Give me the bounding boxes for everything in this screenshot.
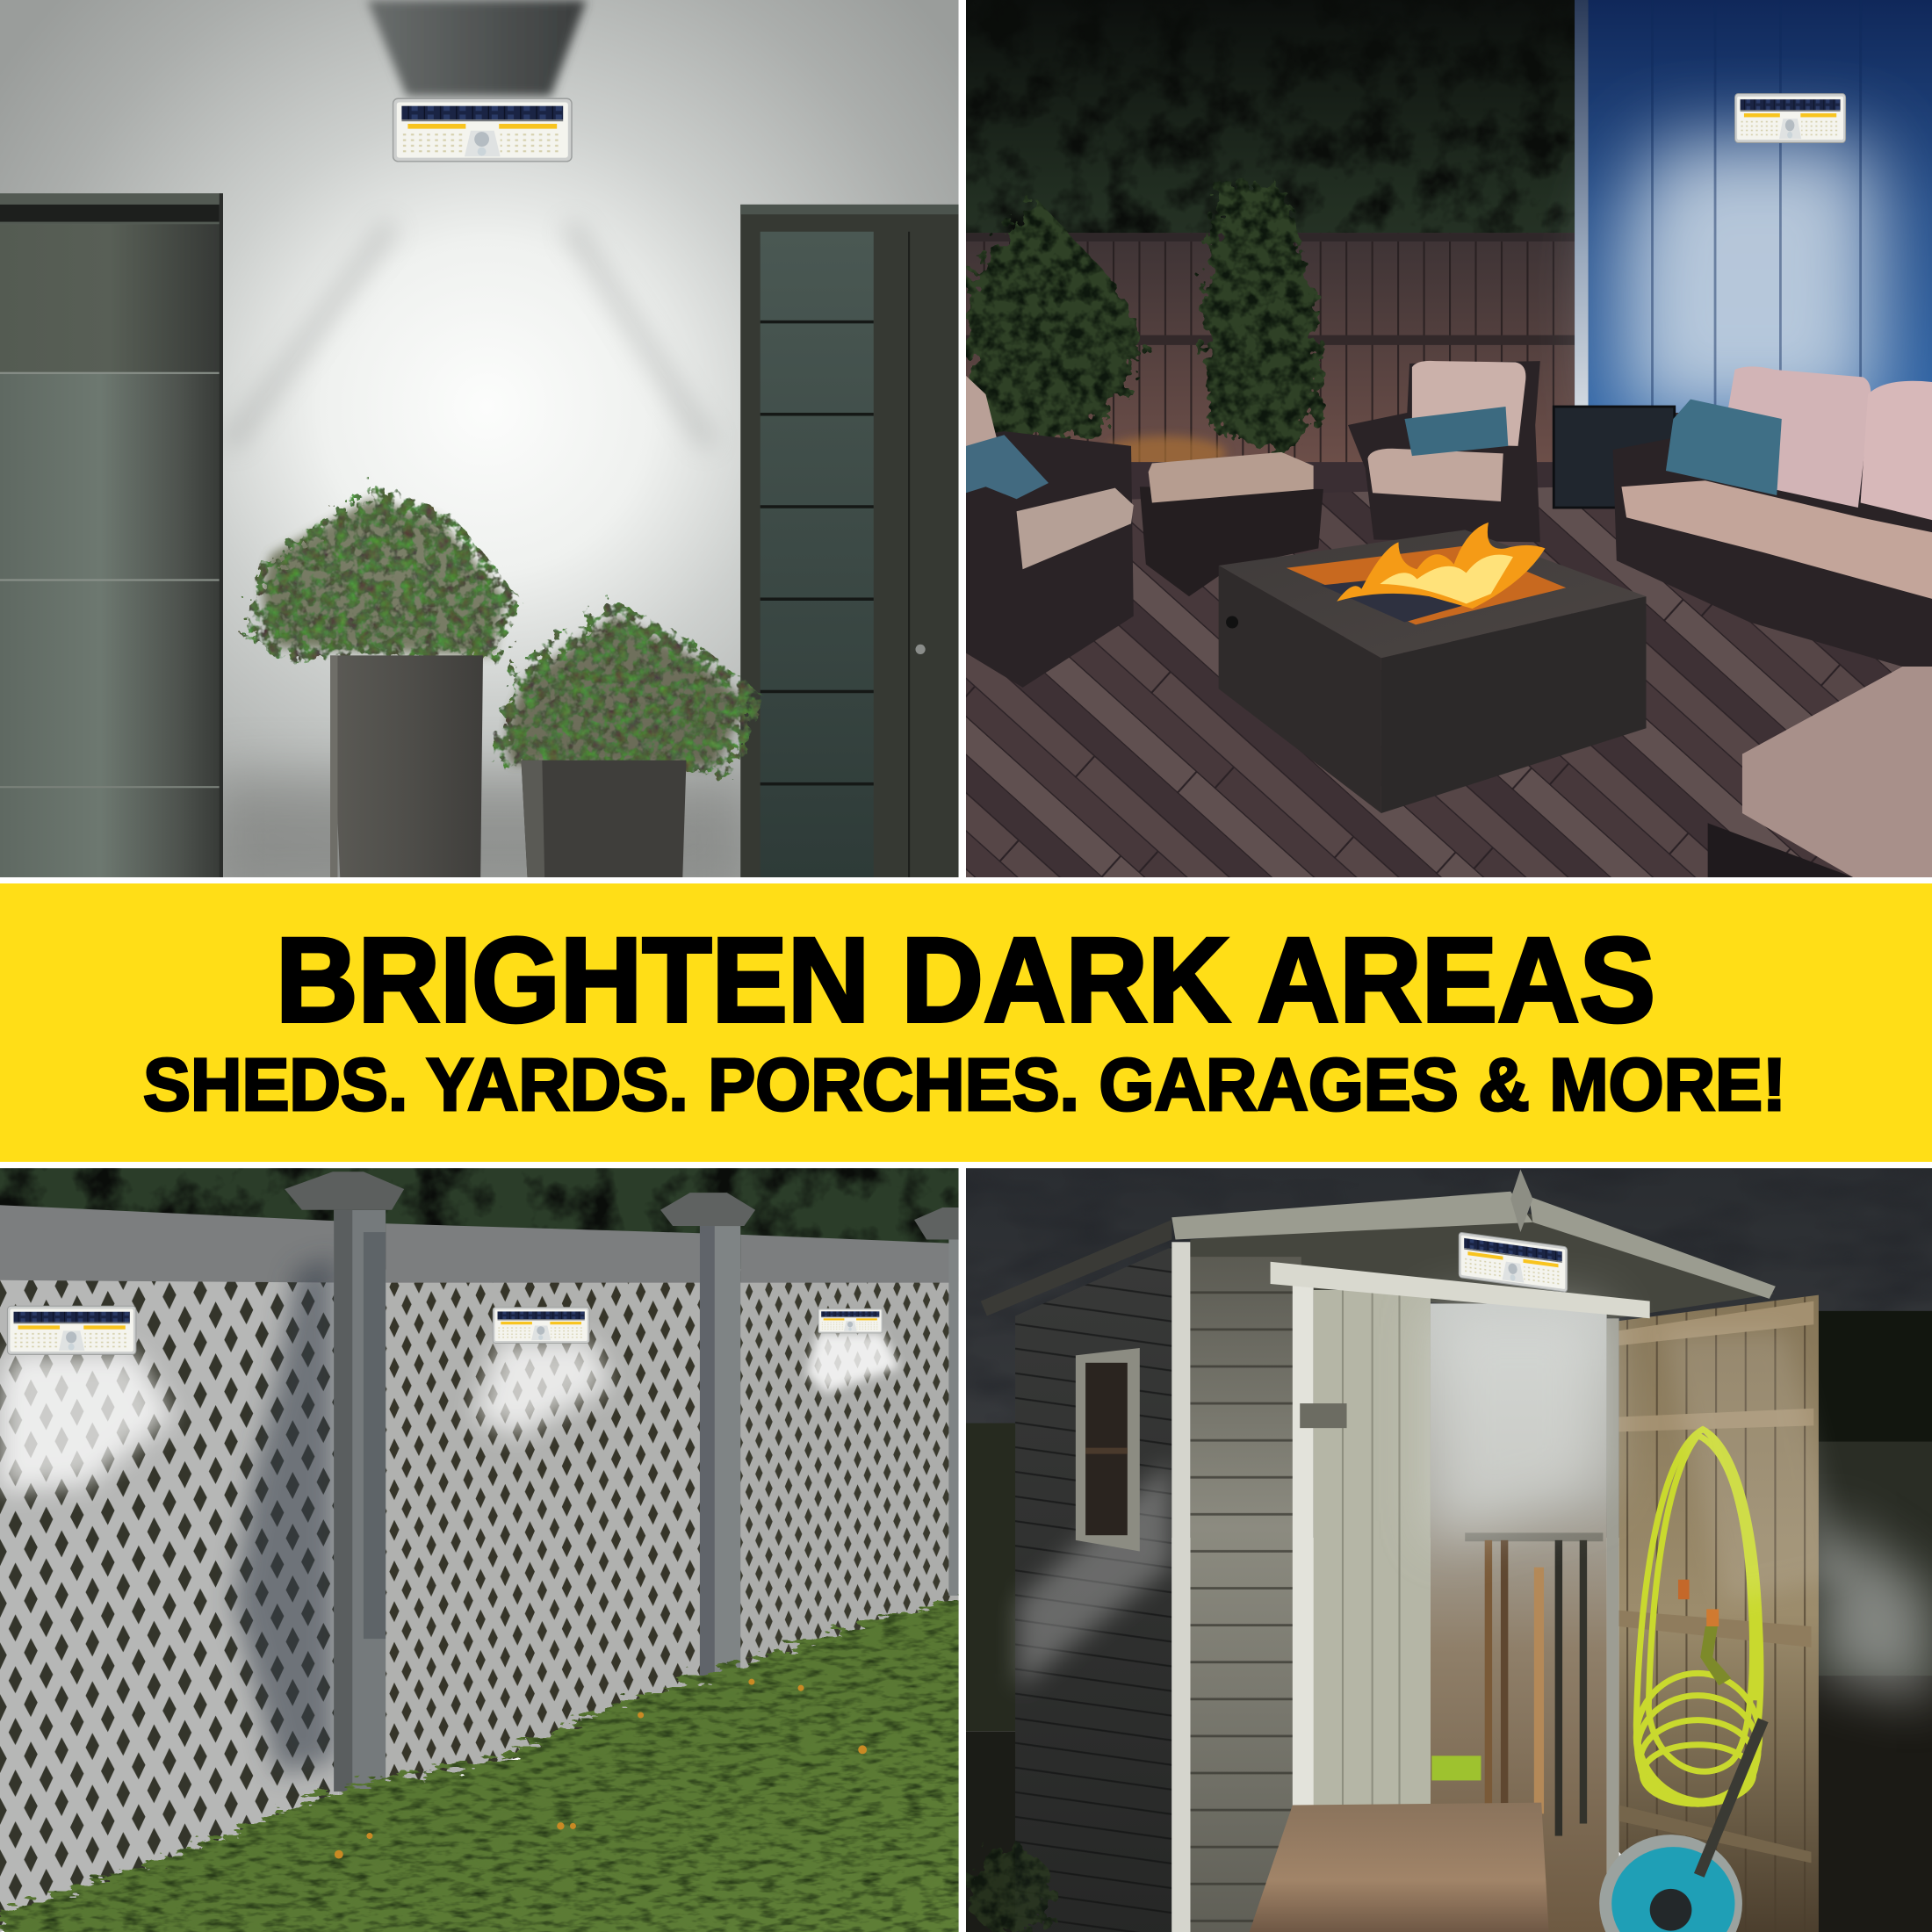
wildflowers [335,1679,867,1859]
bottom wall shade [210,776,752,899]
hose nozzle [1678,1580,1731,1685]
right light spill [1821,1516,1932,1700]
shed front wall [1190,1257,1301,1932]
plant right pot [521,761,687,877]
solar light [1459,1232,1568,1292]
panel: yellow headline banner [0,883,1932,1162]
white wall [0,0,959,877]
solar light [393,98,572,162]
light wedge shadows [229,224,710,446]
panel: lattice fence with three lights [0,1168,973,1932]
right door with panes [740,205,959,877]
right door beam [1663,1330,1849,1602]
window [1076,1348,1140,1551]
shed gable wall [1190,1214,1774,1318]
wheelbarrow [1250,1803,1549,1932]
hose reel [1599,1720,1763,1932]
lattice left [0,1269,339,1932]
open wooden door [1619,1295,1819,1932]
blue lit wall [1575,0,1932,425]
closed door leaf [1314,1290,1431,1932]
plant left pot [330,655,483,877]
upward shadow cone [367,0,587,96]
posts [285,1171,959,1791]
lattice middle [339,1269,709,1811]
shed interior [1431,1303,1607,1932]
solar light [1735,94,1846,142]
panel: wall with plants and solar light [0,0,959,899]
night trees [966,0,1575,234]
lattice right [709,1269,959,1700]
hinge latch [1300,1403,1347,1428]
fire pit [1219,530,1646,813]
solar lights [7,1306,883,1354]
ottoman [1140,452,1323,596]
bushes [966,184,1318,453]
grass [0,1597,973,1932]
side wall light streak [1018,1461,1171,1688]
shed side wall [1015,1247,1171,1932]
dog crate [1554,407,1675,508]
night background [0,1168,959,1291]
roof [981,1170,1776,1316]
plant left foliage [247,487,523,660]
door light mist [1436,1308,1602,1540]
wood deck [966,413,1932,877]
foreground ottoman [1708,667,1932,877]
right sofa [1613,366,1932,675]
headline: BRIGHTEN DARK AREAS [276,913,1655,1048]
background hedge and ground [966,1311,1932,1932]
center armchair [1348,361,1540,542]
tree shadow [234,1257,335,1774]
left garage door [0,193,223,877]
yellow garden hose [1636,1430,1761,1804]
left armchair [966,376,1134,688]
subheadline: SHEDS. YARDS. PORCHES. GARAGES & MORE! [143,1043,1786,1126]
top rails [0,1205,951,1283]
flames [1337,523,1545,609]
wooden fence [966,233,1582,467]
door frame post [1293,1281,1314,1811]
right door post [1607,1318,1619,1932]
corner trim [1171,1242,1190,1932]
plant right foliage [493,602,764,774]
dusk sky [966,1168,1932,1538]
tools [1431,1532,1603,1836]
warm ground glow [1103,436,1226,471]
panel: patio with fire pit [966,0,1932,877]
panel: garden shed [966,1168,1932,1932]
light glows [0,1333,899,1491]
door lintel [1271,1262,1650,1318]
shrub bottom left [969,1847,1052,1932]
